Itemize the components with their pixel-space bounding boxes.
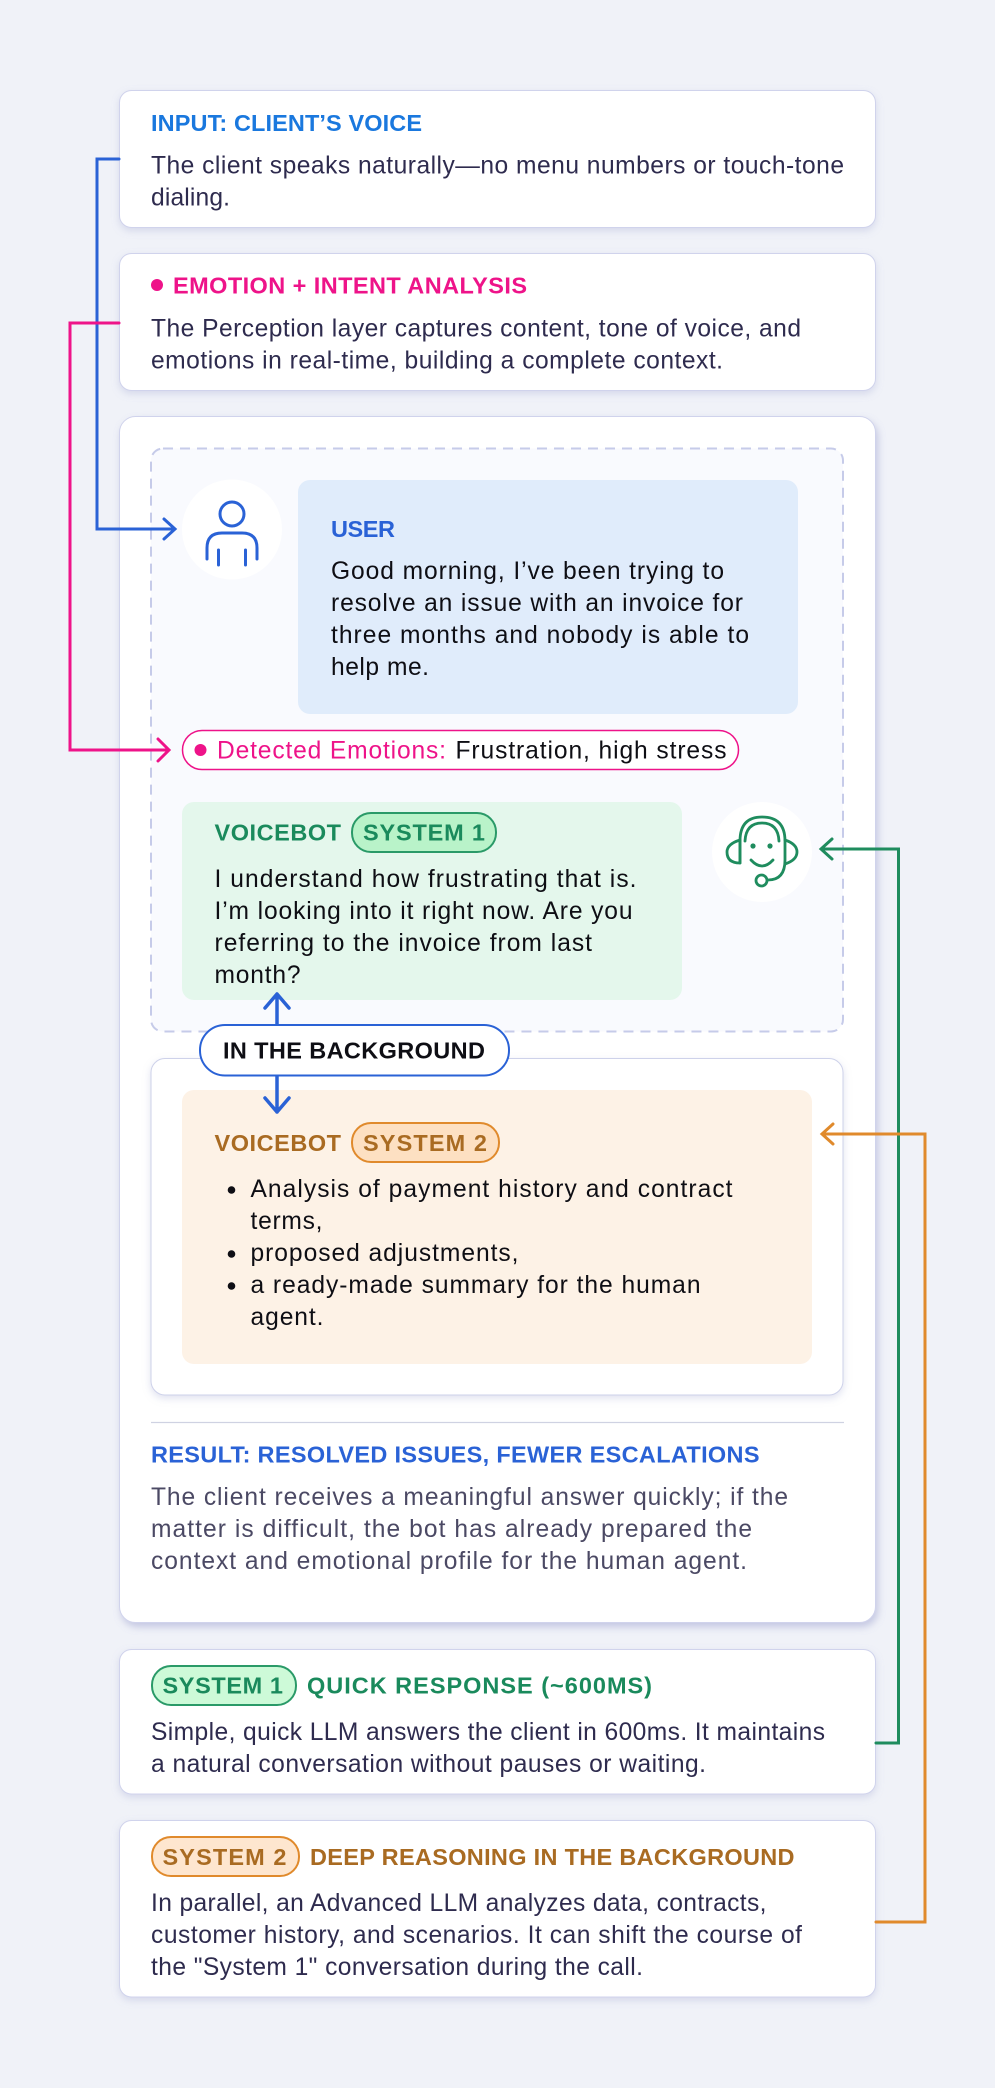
panel: input client's voice [120,90,876,228]
bubble: voicebot system 1: SYSTEM 1 [363,820,485,846]
arrow: input to user [97,159,175,539]
text: system 1 description [151,1719,825,1778]
text: result description: matter is difficult, the bot has already prepared the [151,1516,752,1543]
panel: live conversation dashed area [151,448,843,1032]
text: input description: The client speaks naturally—no menu numbers or touch-tone [151,152,844,180]
label: in the background [200,1025,509,1076]
bubble: user message: help me. [331,654,429,681]
badge: system 1: SYSTEM 1 [162,1672,283,1698]
text: input description [151,152,844,212]
text: perception description: emotions in real-time, building a complete context. [151,348,723,374]
text: system 2 description: the "System 1" conversation during the call. [151,1954,643,1981]
panel: system 2 deep reasoning [120,1820,876,1997]
avatar: user [182,480,282,580]
badge: detected emotions [182,730,738,770]
avatar: voicebot headset [712,802,812,902]
divider and result [151,1422,844,1575]
text: system 1 description: a natural conversation without pauses or waiting. [151,1751,706,1778]
text: result description [151,1484,788,1575]
text: system 1 description: Simple, quick LLM answers the client in 600ms. It maintains [151,1719,825,1746]
bubble: voicebot system 1: month? [214,962,300,989]
bubble: voicebot system 1 [182,802,682,1000]
panel: background process box [151,1058,843,1395]
panel: main conversation [120,416,876,1622]
bubble: voicebot system 2: agent. [250,1304,324,1331]
badge: system 1 [152,1666,296,1705]
bubble: voicebot system 1: VOICEBOT [214,820,342,846]
bubble: voicebot system 2: proposed adjustments, [250,1240,518,1267]
heading: quick response: QUICK RESPONSE (~600MS) [307,1672,652,1698]
panel: system 1 quick response [120,1650,876,1794]
heading: emotion analysis: EMOTION + INTENT ANALYSIS [173,272,527,298]
label: in the background: IN THE BACKGROUND [223,1038,485,1064]
bubble: user message: Good morning, I’ve been trying to [331,558,724,585]
bubble: user message: USER [331,516,395,542]
bubble: user message: three months and nobody is able to [331,622,749,649]
arrow: background double arrow [265,994,289,1112]
arrow: system 1 to voicebot [821,839,898,1743]
arrow: emotion analysis to detected emotions [70,323,169,761]
panel: emotion and intent analysis [120,254,876,390]
bubble: voicebot system 2: VOICEBOT [214,1130,342,1156]
bubble: voicebot system 2 [182,1090,812,1364]
icon: pink dot [151,279,163,291]
text: system 2 description [151,1890,802,1981]
bubble: voicebot system 1: I’m looking into it right now. Are you [214,898,632,925]
badge: detected emotions: Frustration, high stress [456,738,726,764]
arrow: system 2 to background bubble [822,1124,925,1922]
bubble: voicebot system 2: a ready-made summary for the human [250,1272,700,1299]
badge: detected emotions: Detected Emotions: [217,738,446,764]
text: system 2 description: In parallel, an Advanced LLM analyzes data, contracts, [151,1890,766,1917]
heading: input: INPUT: CLIENT’S VOICE [151,110,422,136]
text: result description: context and emotional profile for the human agent. [151,1548,747,1575]
badge: system 2: SYSTEM 2 [162,1844,286,1870]
bubble: voicebot system 2: SYSTEM 2 [363,1130,487,1156]
bubble: user message: resolve an issue with an invoice for [331,590,743,617]
bubble: voicebot system 2: Analysis of payment history and contract [250,1176,733,1203]
heading: result: RESULT: RESOLVED ISSUES, FEWER ESCALATIONS [151,1442,760,1468]
bubble: voicebot system 2: terms, [250,1208,322,1235]
bubble: voicebot system 1: referring to the invoice from last [214,930,592,957]
text: input description: dialing. [151,184,230,212]
badge: system 2 [152,1837,299,1876]
bubble: voicebot system 1: I understand how frustrating that is. [214,866,636,893]
text: perception description [151,316,801,374]
text: perception description: The Perception layer captures content, tone of voice, and [151,316,801,342]
text: result description: The client receives a meaningful answer quickly; if the [151,1484,788,1511]
text: system 2 description: customer history, and scenarios. It can shift the course of [151,1922,802,1949]
heading: deep reasoning: DEEP REASONING IN THE BACKGROUND [310,1844,794,1870]
bubble: user message [298,480,798,714]
